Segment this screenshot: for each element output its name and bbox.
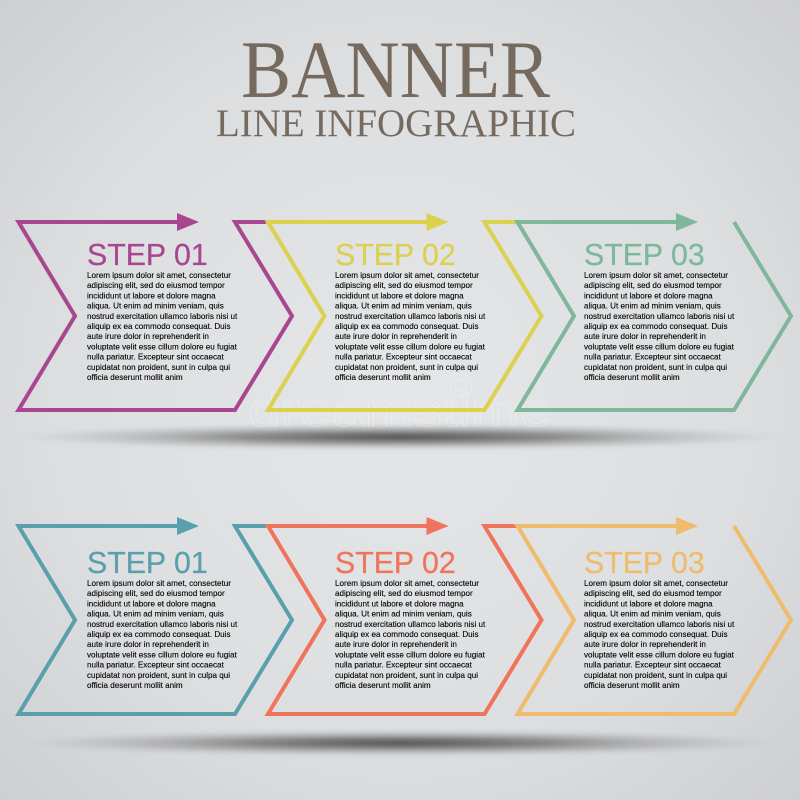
body text: incididunt ut labore et dolore magna [335, 291, 464, 300]
panel: top step 03 [518, 213, 791, 410]
arrowhead [676, 213, 698, 231]
body text: officia deserunt mollit anim [335, 681, 431, 690]
body text: Lorem ipsum dolor sit amet, consectetur [335, 271, 479, 280]
chevron outline [18, 222, 292, 410]
body text: aliqua. Ut enim ad minim veniam, quis [584, 302, 721, 311]
chevron outline [518, 526, 791, 714]
shadow: bottom row [15, 730, 785, 756]
body text: officia deserunt mollit anim [87, 373, 183, 382]
body text: cupidatat non proident, sunt in culpa qui [335, 363, 478, 372]
title: BANNER: BANNER [241, 24, 550, 115]
chevron outline [268, 526, 542, 714]
body text: incididunt ut labore et dolore magna [87, 599, 216, 608]
chevron outline [268, 222, 542, 410]
body text: cupidatat non proident, sunt in culpa qui [584, 363, 727, 372]
body text: aliquip ex ea commodo consequat. Duis [335, 630, 479, 639]
body text: nulla pariatur. Excepteur sint occaecat [335, 353, 473, 362]
body text: incididunt ut labore et dolore magna [87, 291, 216, 300]
body text: cupidatat non proident, sunt in culpa qui [87, 363, 230, 372]
arrowhead [177, 213, 199, 231]
body text: officia deserunt mollit anim [335, 373, 431, 382]
body text: officia deserunt mollit anim [87, 681, 183, 690]
body text: incididunt ut labore et dolore magna [584, 599, 713, 608]
chevron outline [18, 526, 292, 714]
body text: incididunt ut labore et dolore magna [335, 599, 464, 608]
heading: STEP 02 [335, 239, 456, 272]
heading: STEP 01 [87, 239, 208, 272]
subtitle: LINE INFOGRAPHIC: LINE INFOGRAPHIC [216, 102, 576, 145]
panel: bottom step 03 [518, 517, 791, 714]
body text: nulla pariatur. Excepteur sint occaecat [584, 661, 722, 670]
arrowhead [676, 517, 698, 535]
panel: top step 01 [18, 213, 292, 410]
panel: bottom step 02 [268, 517, 542, 714]
body text: aliquip ex ea commodo consequat. Duis [87, 630, 231, 639]
body text: adipiscing elit, sed do eiusmod tempor [87, 281, 225, 290]
body text: officia deserunt mollit anim [584, 373, 680, 382]
body text: voluptate velit esse cillum dolore eu fugiat [335, 342, 486, 351]
body text: aute irure dolor in reprehenderit in [584, 640, 706, 649]
body text: adipiscing elit, sed do eiusmod tempor [584, 589, 722, 598]
body text: nostrud exercitation ullamco laboris nisi ut [584, 312, 735, 321]
body text: Lorem ipsum dolor sit amet, consectetur [87, 271, 231, 280]
body text: cupidatat non proident, sunt in culpa qui [584, 671, 727, 680]
body text: aliqua. Ut enim ad minim veniam, quis [584, 610, 721, 619]
body text: nulla pariatur. Excepteur sint occaecat [335, 661, 473, 670]
body text: adipiscing elit, sed do eiusmod tempor [335, 281, 473, 290]
body text: voluptate velit esse cillum dolore eu fugiat [87, 342, 238, 351]
body text: incididunt ut labore et dolore magna [584, 291, 713, 300]
heading: STEP 02 [335, 547, 456, 580]
body text: nostrud exercitation ullamco laboris nisi ut [584, 620, 735, 629]
body text: aute irure dolor in reprehenderit in [584, 332, 706, 341]
arrowhead [426, 213, 448, 231]
panel: bottom step 01 [18, 517, 292, 714]
heading: STEP 03 [584, 239, 705, 272]
body text: voluptate velit esse cillum dolore eu fugiat [87, 650, 238, 659]
body text: voluptate velit esse cillum dolore eu fugiat [584, 342, 735, 351]
body text: adipiscing elit, sed do eiusmod tempor [584, 281, 722, 290]
body text: voluptate velit esse cillum dolore eu fugiat [584, 650, 735, 659]
body text: aliqua. Ut enim ad minim veniam, quis [335, 302, 472, 311]
body text: aute irure dolor in reprehenderit in [87, 332, 209, 341]
body text: aliquip ex ea commodo consequat. Duis [584, 322, 728, 331]
body text: officia deserunt mollit anim [584, 681, 680, 690]
body text: aliqua. Ut enim ad minim veniam, quis [87, 610, 224, 619]
body text: aliqua. Ut enim ad minim veniam, quis [335, 610, 472, 619]
body text: aute irure dolor in reprehenderit in [87, 640, 209, 649]
chevron outline [518, 222, 791, 410]
body text: Lorem ipsum dolor sit amet, consectetur [335, 579, 479, 588]
body text: cupidatat non proident, sunt in culpa qui [87, 671, 230, 680]
shadow: top row [15, 424, 785, 450]
body text: nulla pariatur. Excepteur sint occaecat [87, 353, 225, 362]
body text: nulla pariatur. Excepteur sint occaecat [87, 661, 225, 670]
body text: nostrud exercitation ullamco laboris nisi ut [87, 312, 238, 321]
body text: cupidatat non proident, sunt in culpa qui [335, 671, 478, 680]
body text: aliquip ex ea commodo consequat. Duis [335, 322, 479, 331]
body text: aliquip ex ea commodo consequat. Duis [584, 630, 728, 639]
body text: aute irure dolor in reprehenderit in [335, 332, 457, 341]
body text: adipiscing elit, sed do eiusmod tempor [87, 589, 225, 598]
body text: aute irure dolor in reprehenderit in [335, 640, 457, 649]
heading: STEP 01 [87, 547, 208, 580]
body text: nostrud exercitation ullamco laboris nisi ut [335, 312, 486, 321]
heading: STEP 03 [584, 547, 705, 580]
body text: Lorem ipsum dolor sit amet, consectetur [584, 579, 728, 588]
body text: aliquip ex ea commodo consequat. Duis [87, 322, 231, 331]
body text: adipiscing elit, sed do eiusmod tempor [335, 589, 473, 598]
body text: Lorem ipsum dolor sit amet, consectetur [584, 271, 728, 280]
body text: nulla pariatur. Excepteur sint occaecat [584, 353, 722, 362]
arrowhead [426, 517, 448, 535]
watermark [248, 374, 552, 436]
watermark: dreamstime [248, 384, 552, 436]
body text: nostrud exercitation ullamco laboris nisi ut [87, 620, 238, 629]
body text: nostrud exercitation ullamco laboris nisi ut [335, 620, 486, 629]
body text: Lorem ipsum dolor sit amet, consectetur [87, 579, 231, 588]
body text: voluptate velit esse cillum dolore eu fugiat [335, 650, 486, 659]
panel: top step 02 [268, 213, 542, 410]
body text: aliqua. Ut enim ad minim veniam, quis [87, 302, 224, 311]
arrowhead [177, 517, 199, 535]
